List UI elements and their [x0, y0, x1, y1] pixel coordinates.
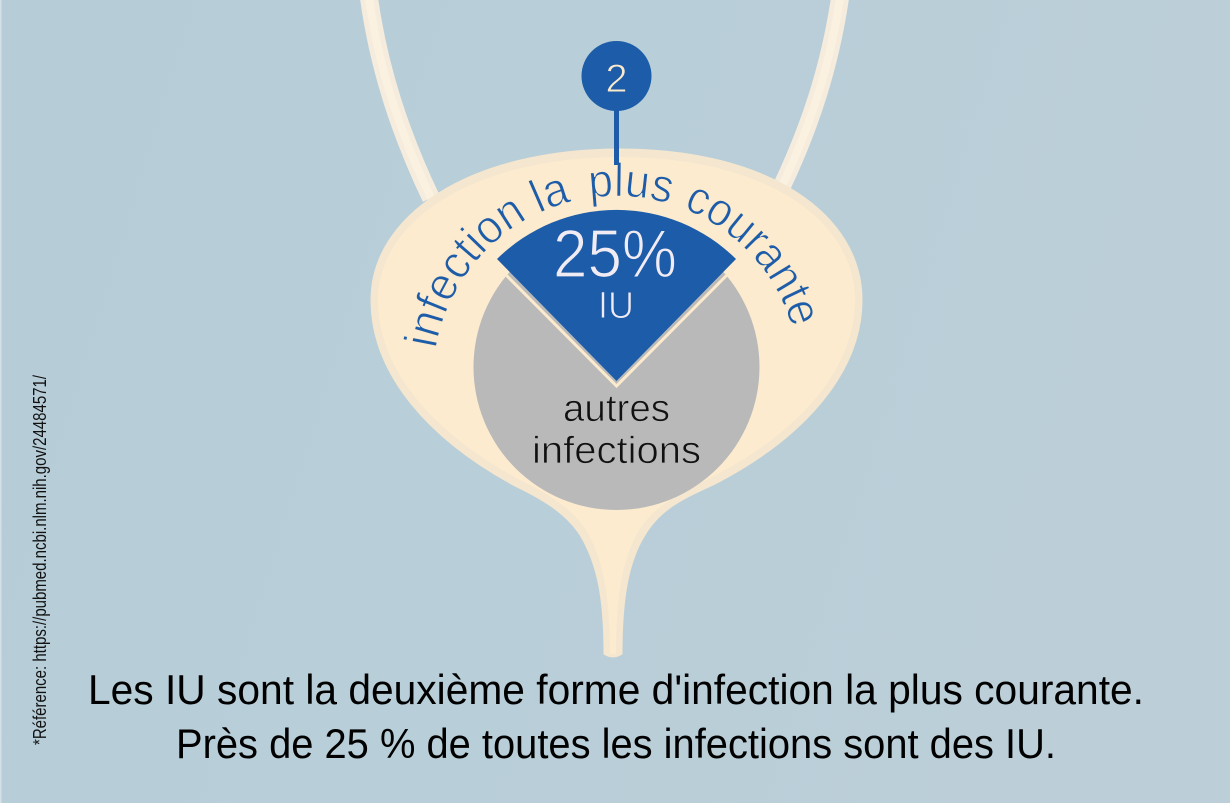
curved label: la	[528, 180, 572, 212]
bladder body	[371, 149, 862, 657]
marker number: 2	[605, 57, 628, 101]
left ureter	[369, 0, 431, 198]
caption line 1: Les IU sont la deuxième forme d'infection la plus courante.	[88, 666, 1144, 713]
caption line 2: Près de 25 % de toutes les infections sont des IU.	[176, 720, 1056, 767]
curved label: courante	[688, 190, 813, 324]
curved label	[404, 162, 813, 346]
marker line	[614, 108, 619, 165]
bladder illustration	[369, 0, 862, 657]
caption	[88, 666, 1144, 767]
slice separator	[505, 274, 728, 386]
curved label: plus	[590, 162, 672, 207]
number marker	[582, 41, 652, 165]
autres label: autres	[563, 388, 670, 430]
25% IU slice	[497, 210, 736, 381]
reference note: *Référence: https://pubmed.ncbi.nlm.nih.gov/24484571/	[30, 375, 50, 745]
inner bladder fill	[378, 157, 855, 654]
percent label: 25%	[553, 216, 677, 292]
other infections slice	[474, 224, 760, 510]
right ureter	[781, 0, 840, 188]
infections label: infections	[532, 430, 701, 472]
pie chart	[474, 210, 760, 510]
IU label: IU	[598, 285, 634, 327]
marker circle	[582, 41, 652, 111]
curved label: infection	[404, 202, 525, 346]
